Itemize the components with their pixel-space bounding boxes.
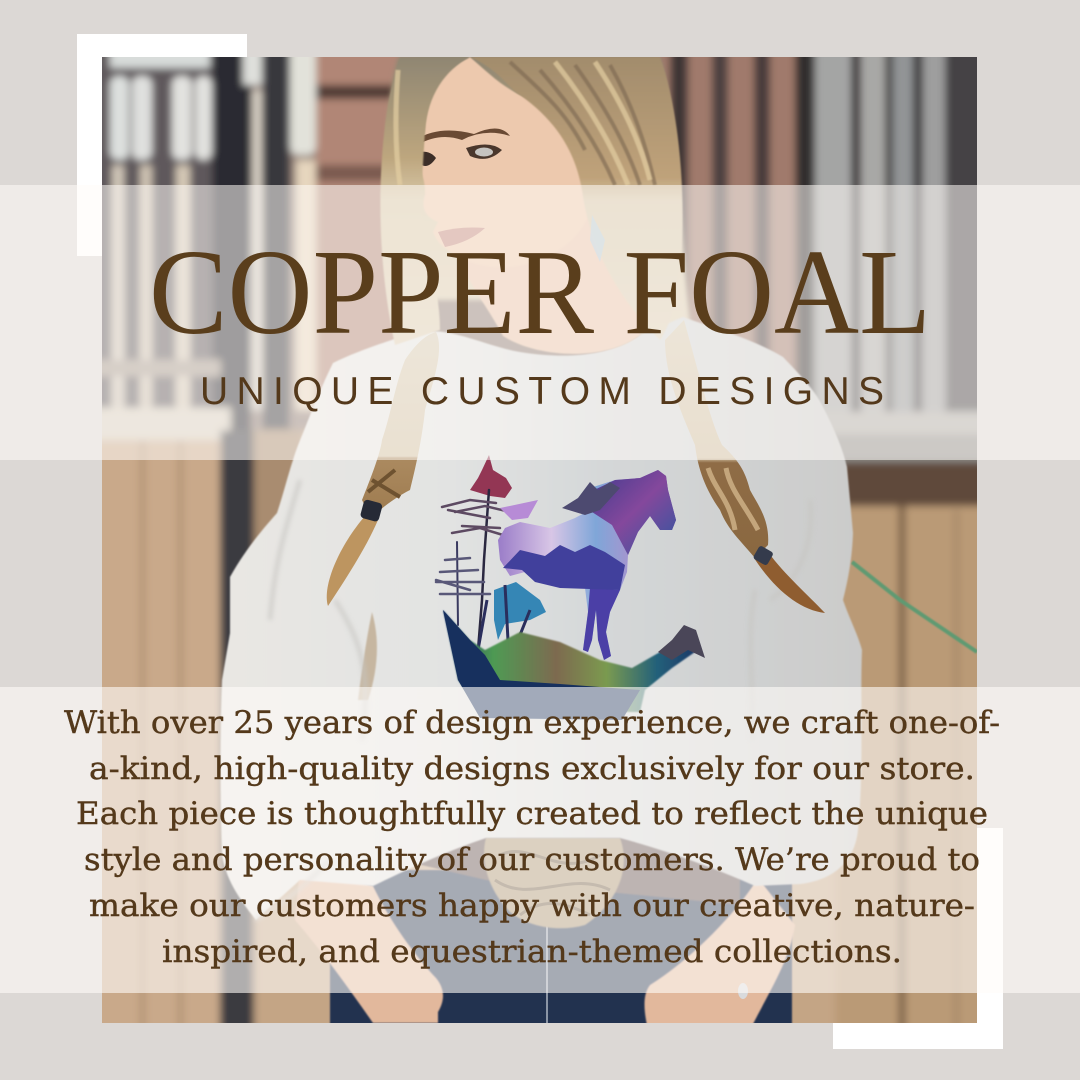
description text	[64, 705, 1000, 970]
title: COPPER FOAL	[149, 225, 931, 360]
tree: left small	[436, 542, 490, 625]
description text: inspired, and equestrian-themed collections.	[162, 934, 902, 970]
sleeve gap left	[358, 612, 377, 700]
photo: woman in horse sweatshirt	[102, 57, 977, 1023]
frame bracket: bottom right	[833, 828, 1003, 1049]
tree: teal foliage	[494, 582, 546, 640]
sleeve shading	[258, 480, 368, 920]
description text: With over 25 years of design experience, we craft one-of-	[64, 705, 1000, 741]
right roots	[658, 625, 705, 660]
jeans	[330, 870, 792, 1040]
right braid	[665, 320, 825, 613]
description text: a-kind, high-quality designs exclusively for our store.	[89, 751, 975, 787]
jeans centre seam	[546, 925, 548, 1023]
photo background: stable bars and wood	[102, 57, 977, 1023]
horse head and neck	[590, 470, 676, 555]
belt buckle	[484, 838, 624, 928]
tree: dark trunks	[478, 585, 530, 650]
earring	[590, 215, 605, 262]
frame bracket: top left	[77, 34, 247, 256]
translucent band: description	[0, 687, 1080, 993]
face	[422, 57, 582, 252]
blond hair front	[380, 57, 682, 345]
hair back	[387, 57, 692, 345]
buckle paisley detail	[495, 852, 610, 915]
left hand	[295, 868, 443, 1023]
facial features	[417, 128, 510, 247]
horse legs	[583, 588, 620, 660]
subtitle: UNIQUE CUSTOM DESIGNS	[200, 370, 884, 413]
horse and forest artwork	[436, 455, 705, 720]
horse body	[498, 470, 676, 660]
description text: make our customers happy with our creative, nature-	[89, 888, 975, 924]
green rope	[852, 562, 977, 652]
sweatshirt	[220, 317, 862, 920]
right hair tie	[754, 546, 773, 565]
cliff shadow	[443, 610, 640, 720]
left braid	[327, 332, 439, 606]
left braid tail	[327, 516, 378, 606]
tree: tall red pine	[442, 455, 538, 650]
forest inside horse	[503, 545, 625, 590]
right hand	[644, 878, 795, 1030]
description text: style and personality of our customers. We’re proud to	[84, 842, 980, 878]
right braid tail	[754, 552, 825, 613]
translucent band: title	[0, 185, 1080, 460]
belt	[400, 836, 740, 905]
neck	[480, 296, 640, 354]
cliff	[443, 610, 695, 712]
horse mane	[562, 482, 620, 515]
left hair tie	[360, 500, 382, 522]
description text: Each piece is thoughtfully created to reflect the unique	[76, 796, 988, 832]
ring	[738, 983, 748, 999]
